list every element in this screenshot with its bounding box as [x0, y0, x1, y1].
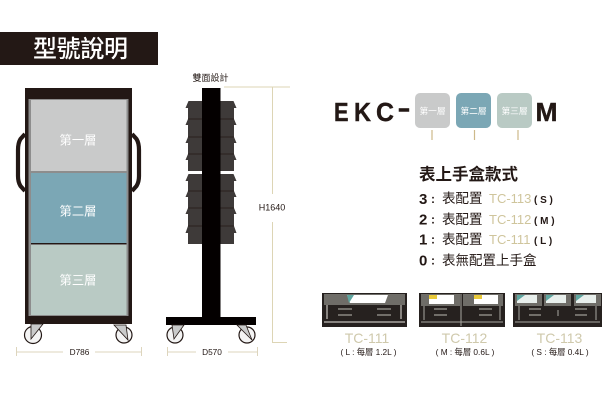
panel: third layer: 第三層 [60, 272, 96, 288]
label: TC-113: ( S : 每層 0.4L ) [531, 347, 589, 357]
connector ticks [432, 130, 518, 140]
panel: second layer: 第二層 [60, 204, 96, 218]
code box: first layer [415, 93, 450, 128]
model code prefix: K [354, 97, 371, 127]
option 1: 1 [419, 232, 427, 248]
dimension H1640 [224, 87, 290, 342]
model code prefix [334, 92, 410, 127]
option 1: : [431, 232, 435, 246]
dimension D786 [16, 347, 142, 357]
model code suffix: M [536, 97, 558, 127]
option 0: 表無配置上手盒 [442, 252, 537, 268]
option 1: TC-111 [489, 232, 530, 247]
panel: first layer: 第一層 [60, 132, 96, 148]
caster left [24, 324, 43, 344]
option 2: 表配置 [442, 212, 482, 227]
label: TC-112 [436, 330, 495, 357]
tiered trays [186, 101, 236, 244]
option 2: TC-112 [489, 212, 531, 227]
option 2: 2 [419, 212, 427, 228]
panel: third layer [31, 245, 126, 315]
side view stand [166, 88, 256, 343]
option 2: ( M ) [534, 216, 555, 227]
title bar: 型號說明 [33, 36, 128, 63]
label: TC-111: ( L : 每層 1.2L ) [340, 347, 397, 357]
option 3: 3 [419, 191, 427, 208]
option 1 [419, 232, 552, 248]
code box: third layer [497, 93, 532, 128]
code box: second layer: 第二層 [460, 105, 487, 116]
model code prefix: - [398, 92, 410, 122]
caster left [167, 325, 184, 343]
label: TC-113: TC-113 [537, 330, 583, 346]
label: TC-111 [340, 330, 397, 357]
label: TC-113 [531, 330, 589, 357]
product: TC-111 tray [322, 293, 407, 327]
label: TC-112: TC-112 [442, 330, 488, 346]
pole [202, 88, 220, 318]
option 1: ( L ) [534, 236, 552, 247]
label: double-sided design: 雙面設計 [192, 72, 229, 83]
label: TC-112: ( M : 每層 0.6L ) [436, 347, 495, 357]
dimension D570: D570 [202, 347, 222, 357]
front view cabinet [18, 88, 139, 344]
panel: first layer [31, 100, 126, 171]
option 0: 0 [419, 252, 427, 270]
model code prefix: E [334, 97, 348, 127]
code box: third layer: 第三層 [501, 105, 528, 116]
base bar [166, 317, 256, 325]
title bar [0, 32, 158, 65]
cabinet frame [25, 88, 132, 324]
panel: second layer [31, 173, 126, 243]
model code prefix: C [376, 97, 394, 127]
dimension H1640: H1640 [259, 202, 285, 212]
label: TC-111: TC-111 [345, 330, 390, 346]
option 2 [419, 212, 555, 228]
option 3 [419, 191, 553, 208]
option 0: : [431, 254, 435, 268]
dimension D786: D786 [70, 347, 90, 357]
tray separators [188, 119, 234, 226]
code box: first layer: 第一層 [419, 105, 446, 116]
option 3: 表配置 [442, 191, 482, 206]
product: TC-113 tray [513, 293, 602, 327]
option 3: TC-113 [489, 191, 531, 206]
option 0 [419, 252, 537, 270]
option 3: ( S ) [534, 195, 553, 206]
code box: second layer [456, 93, 491, 128]
caster right [114, 325, 132, 343]
product: TC-112 tray [419, 293, 505, 327]
handles [18, 134, 139, 191]
caster right [237, 325, 255, 343]
option 2: : [431, 212, 435, 226]
option 3: : [431, 192, 435, 206]
dimension D570 [168, 347, 258, 357]
option 1: 表配置 [442, 232, 482, 247]
heading: top handle box styles: 表上手盒款式 [419, 164, 518, 184]
